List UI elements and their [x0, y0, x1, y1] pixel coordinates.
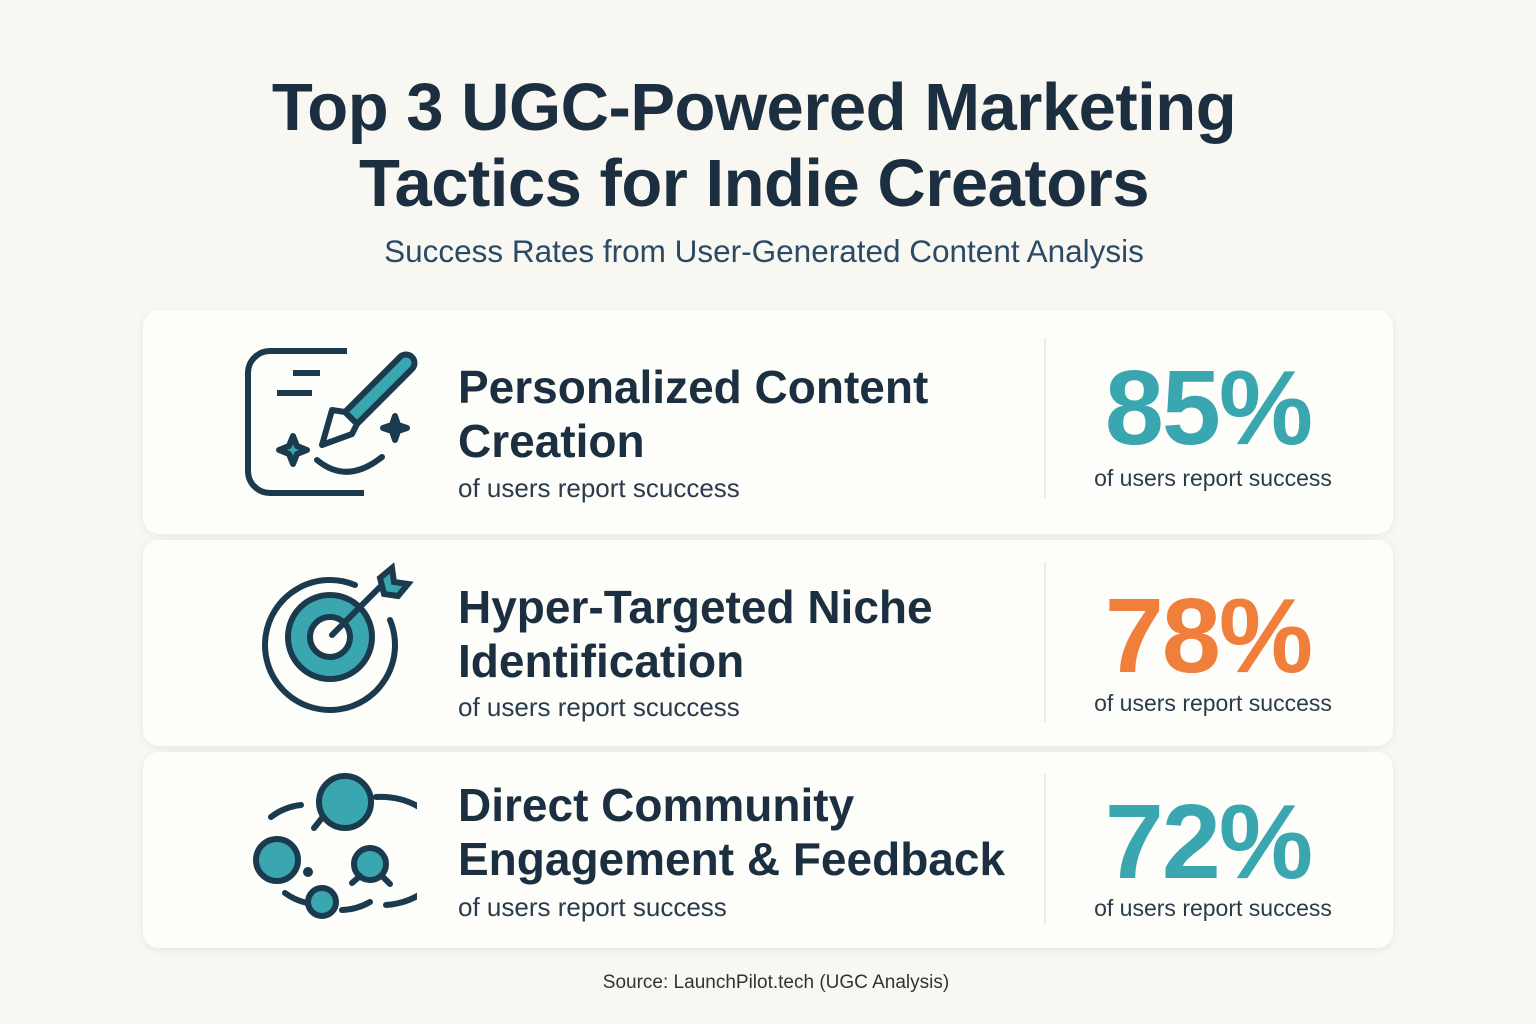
heading: [458, 361, 928, 467]
heading: Identification: [458, 635, 744, 687]
source: Source: LaunchPilot.tech (UGC Analysis): [603, 972, 949, 993]
title: [272, 70, 1236, 221]
subtext: of users report scuccess: [458, 473, 740, 503]
stat label: of users report success: [1094, 690, 1332, 716]
heading: Creation: [458, 415, 645, 467]
stat: 78%: 78%: [1105, 577, 1311, 695]
panel: niche identification: [143, 540, 1393, 746]
title: Top 3 UGC-Powered Marketing: [272, 70, 1236, 145]
subtitle: Success Rates from User-Generated Content Analysis: [384, 233, 1144, 269]
heading: Engagement & Feedback: [458, 833, 1005, 885]
heading: [458, 779, 1006, 885]
heading: Personalized Content: [458, 361, 928, 413]
panel: personalized content: [143, 310, 1393, 534]
stat label: of users report success: [1094, 465, 1332, 491]
subtext: of users report scuccess: [458, 692, 740, 722]
stat label: of users report success: [1094, 895, 1332, 921]
heading: Direct Community: [458, 779, 854, 831]
heading: Hyper-Targeted Niche: [458, 581, 933, 633]
subtext: of users report success: [458, 892, 727, 922]
icon: target: [262, 562, 414, 713]
stat: 72%: 72%: [1105, 783, 1311, 901]
stat: 85%: 85%: [1105, 349, 1311, 467]
icon: community: [253, 773, 417, 919]
icon: pencil doc: [245, 348, 418, 496]
panel: community engagement: [143, 752, 1393, 948]
heading: [458, 581, 933, 687]
title: Tactics for Indie Creators: [359, 146, 1149, 221]
